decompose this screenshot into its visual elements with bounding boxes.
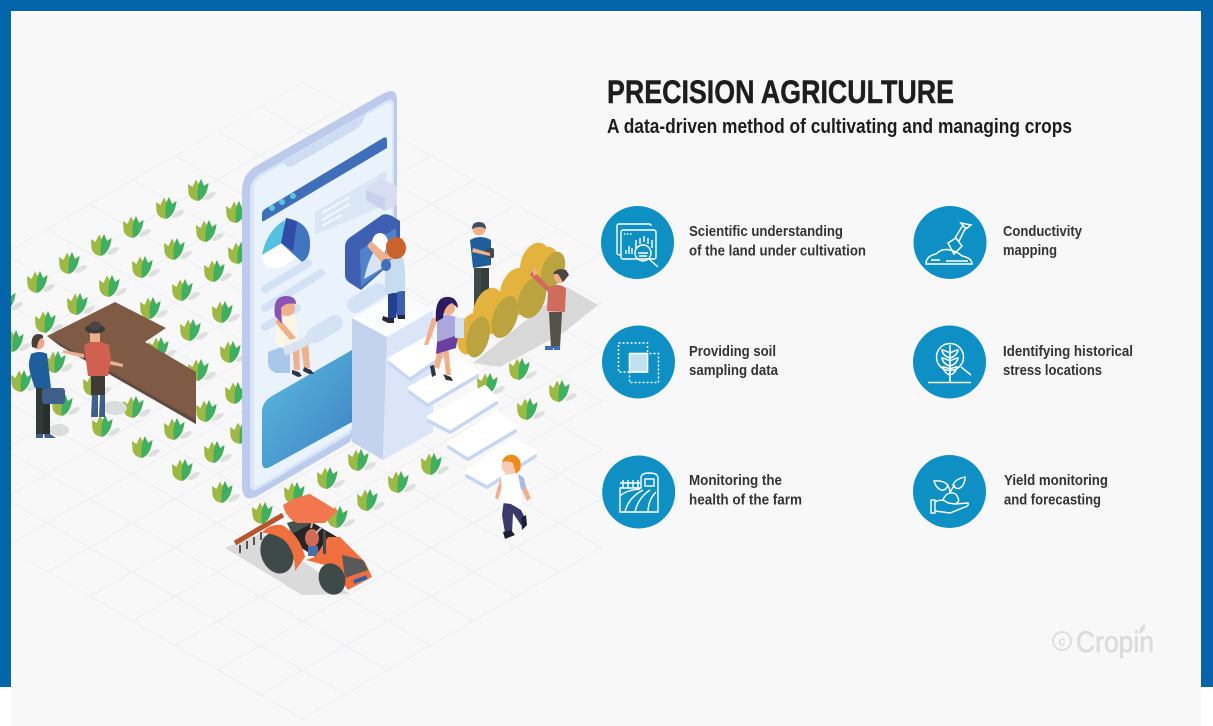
benefit 4: conductivity mapping — [914, 206, 986, 279]
cab — [287, 518, 337, 558]
crop plants field — [0, 179, 578, 529]
benefit 5 label — [1003, 343, 1133, 379]
benefit 6: yield monitoring — [913, 455, 986, 528]
icon: shovel in soil — [926, 223, 972, 264]
hay rolls — [453, 238, 570, 360]
benefit 4 label: Conductivity — [1003, 223, 1083, 240]
step 4 — [449, 413, 515, 459]
person: walking boy — [495, 455, 531, 539]
exhaust pipe — [323, 530, 326, 554]
roll 4 — [515, 238, 570, 292]
person: man with briefcase — [29, 334, 69, 438]
benefit 2: soil sampling — [602, 326, 675, 398]
person: man pushing hay — [530, 268, 569, 350]
logo: Cropin: c — [1058, 634, 1066, 648]
person: woman sitting with laptop — [268, 296, 314, 377]
phone body — [242, 91, 397, 499]
user tile — [345, 214, 400, 290]
person: farmer with hat — [63, 322, 127, 417]
hay shadow — [473, 287, 598, 367]
benefit 1 label: Scientific understanding — [689, 223, 843, 240]
benefit 1: scientific understanding — [601, 206, 674, 279]
benefit 3 label: Monitoring the — [689, 472, 782, 489]
person: walking woman — [424, 297, 464, 381]
benefit 3 label: health of the farm — [689, 492, 802, 508]
radiator — [342, 555, 368, 578]
icon: chart window with magnifier — [617, 224, 658, 267]
driver — [305, 520, 322, 556]
benefit 4 label — [1003, 223, 1083, 259]
lower blue panel — [262, 350, 352, 468]
white pedestal — [352, 293, 433, 460]
roll 2 — [467, 284, 524, 342]
tractor shadow — [225, 533, 350, 595]
steps — [390, 338, 535, 487]
subtitle: A data-driven method of cultivating and managing crops — [607, 116, 1072, 138]
rear fender — [262, 525, 305, 571]
icon: farm field and barn — [620, 473, 658, 512]
cube — [366, 178, 397, 211]
logo: Cropin — [1053, 624, 1154, 659]
rear wheel — [255, 528, 299, 578]
canopy — [283, 494, 337, 523]
benefit 5 label: Identifying historical — [1003, 343, 1133, 360]
icon: hand holding seedling — [931, 477, 968, 513]
logo: Cropin: Cropin — [1076, 626, 1154, 659]
tractor — [225, 494, 372, 598]
pie chart — [262, 218, 310, 269]
person: man in blue shirt — [470, 222, 494, 306]
brown soil plot — [47, 302, 196, 424]
roll 1 — [453, 311, 494, 360]
benefit 6 label — [1004, 472, 1108, 508]
benefit 1 label: of the land under cultivation — [689, 242, 866, 260]
phone notch — [283, 113, 366, 167]
title: PRECISION AGRICULTURE — [607, 74, 954, 110]
front bumper — [353, 575, 368, 584]
smartphone illustration — [242, 91, 400, 499]
step 5 — [467, 440, 535, 487]
front wheel — [314, 560, 350, 598]
icon: wheat under magnifier — [928, 344, 971, 382]
icon: overlapping dotted squares — [618, 343, 658, 382]
phone inner bezel — [250, 100, 394, 490]
benefit 2 label: sampling data — [689, 362, 779, 379]
tractor body and hood — [306, 537, 372, 590]
window dots — [269, 193, 296, 211]
benefit 2 label: Providing soil — [689, 343, 776, 360]
header bar — [262, 137, 387, 221]
benefit 4 label: mapping — [1003, 242, 1057, 259]
benefit 6 label: Yield monitoring — [1004, 472, 1108, 489]
benefit 3: farm health — [602, 456, 675, 528]
benefit 6 label: and forecasting — [1004, 492, 1101, 508]
person: man on pedestal — [367, 237, 406, 323]
text card — [315, 170, 387, 235]
benefit 3 label — [689, 472, 802, 508]
placeholder bars — [265, 263, 378, 335]
benefit 5: historical stress locations — [913, 326, 986, 398]
roll 3 — [494, 264, 551, 322]
step 2 — [410, 360, 477, 405]
step 3 — [429, 387, 496, 432]
isometric floor grid — [11, 82, 603, 720]
phone screen — [254, 103, 392, 486]
step 1 — [390, 338, 447, 379]
benefit 5 label: stress locations — [1003, 362, 1102, 379]
plough attachment — [235, 515, 283, 553]
benefit 2 label — [689, 343, 779, 379]
benefit 1 label — [689, 223, 866, 260]
